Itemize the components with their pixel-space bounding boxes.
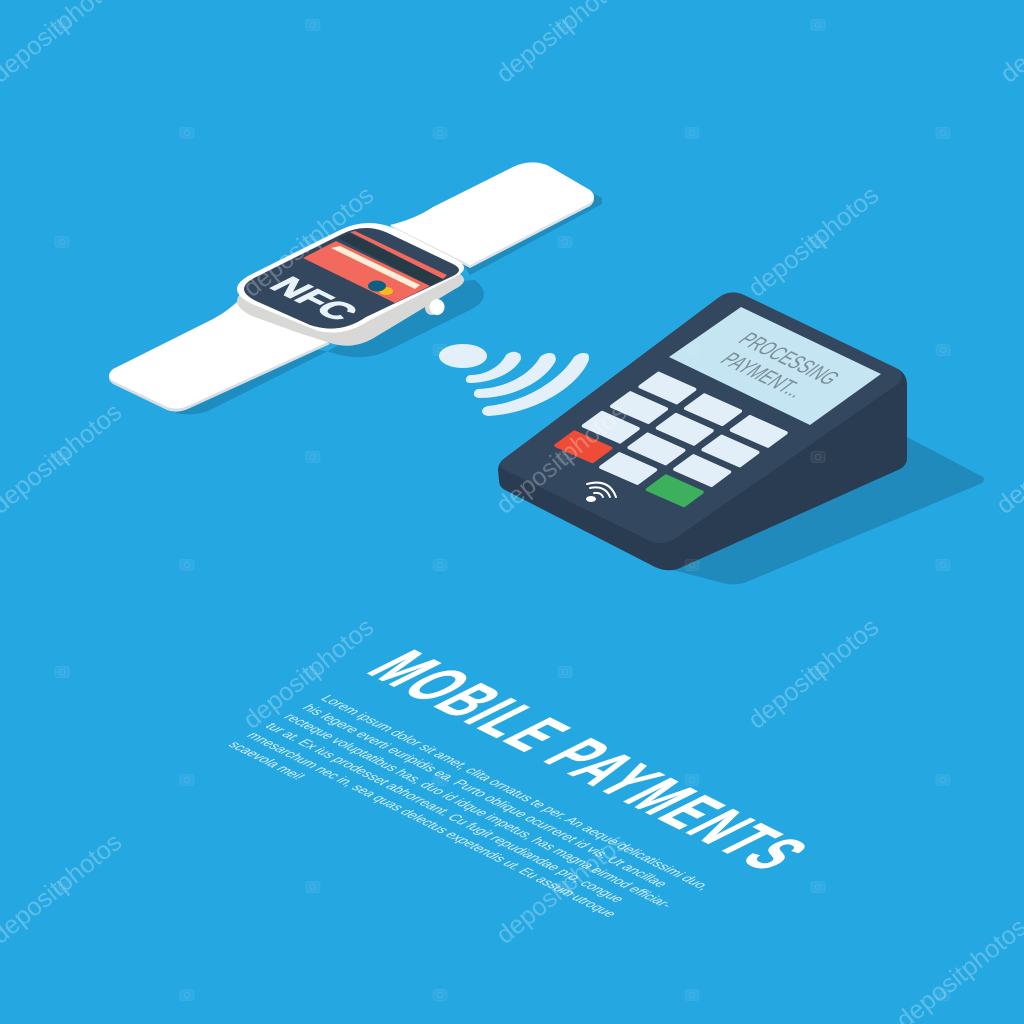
body text: Lorem ipsum dolor sit amet, clita ornatus te per. An aeque delicatissimi duo, xyxy=(316,693,714,892)
screen text: PROCESSING xyxy=(732,329,846,389)
green confirm key xyxy=(648,476,702,506)
watermarks: depositphotos xyxy=(491,398,632,520)
watermarks: depositphotos xyxy=(238,181,379,303)
icon: contactless on terminal xyxy=(586,483,616,502)
shadow: terminal xyxy=(673,437,984,584)
strap: lower xyxy=(109,296,330,412)
watermarks: depositphotos xyxy=(238,613,379,735)
icon: contactless waves xyxy=(439,344,589,416)
red cancel key xyxy=(556,432,610,462)
shadow: watch xyxy=(175,192,602,414)
watch case side xyxy=(237,235,464,346)
body text: mnesarchum nec in, sea quas delectus expetendis ut. Eu assum utroque xyxy=(242,730,621,919)
body text: recteque voluptatibus has, duo id idque impetus, has magna eirmod efficiar- xyxy=(279,712,676,910)
smartwatch xyxy=(109,162,594,412)
body text: tur at. Ex ius prodesset abhorreant. Cu fugit repudiandae pro, congue xyxy=(261,721,628,905)
strap: upper xyxy=(390,162,594,268)
body text: scaevola mei! xyxy=(224,739,309,782)
watch case top xyxy=(237,223,464,333)
watermarks: depositphotos xyxy=(743,613,884,735)
body text: his legere everti euripidis ea. Purto oblique ocurreret id vis. Ut ancillae xyxy=(298,702,672,889)
crown button xyxy=(425,299,444,315)
terminal top face xyxy=(500,292,902,543)
watermarks: depositphotos xyxy=(491,828,632,950)
label: NFC: NFC xyxy=(261,272,367,325)
credit card on screen xyxy=(303,231,447,303)
payment terminal xyxy=(498,292,907,570)
terminal body sides xyxy=(498,292,907,570)
terminal screen xyxy=(669,307,881,425)
watermarks: depositphotos xyxy=(743,181,884,303)
screen text: PAYMENT... xyxy=(714,349,812,402)
screen text xyxy=(714,329,846,402)
watch screen xyxy=(244,228,459,329)
keypad xyxy=(584,373,786,485)
